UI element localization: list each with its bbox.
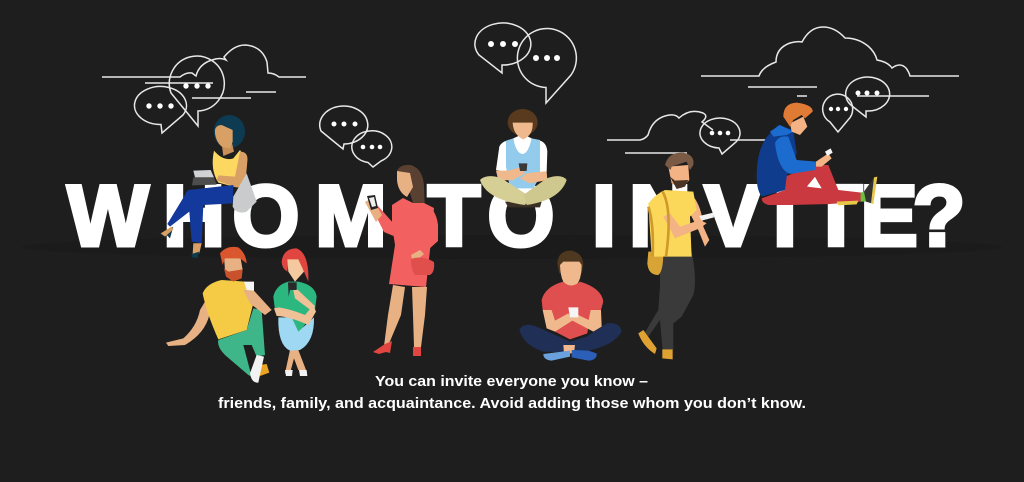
speech bubble: right lower (823, 94, 853, 132)
cloud: left (102, 45, 306, 98)
speech bubble: left small (134, 87, 186, 133)
figure: man in blue hoodie sitting on title (757, 103, 877, 205)
speech bubble pair: above woman in dress (320, 106, 392, 167)
speech bubble: right upper (846, 77, 890, 117)
figure: woman with tablet (158, 115, 257, 258)
caption text: friends, family, and acquaintance. Avoid adding those whom you don’t know. (218, 395, 806, 412)
speech bubble pair: top centre (475, 23, 576, 103)
figure: man in red shirt, cross-legged (519, 251, 622, 361)
figure: man with vest, cross-legged on title (480, 109, 567, 207)
cloud: middle right (607, 111, 766, 153)
speech bubble: left large (169, 56, 224, 126)
figure: man with beard, sitting (166, 247, 272, 383)
title: WHOM TO INVITE? (67, 168, 965, 264)
figure: red-haired woman, sitting (273, 248, 317, 376)
figure: standing man with shoulder bag (638, 153, 714, 359)
caption text: You can invite everyone you know – (375, 373, 648, 390)
figure: woman in coral dress (365, 165, 438, 356)
speech bubble: middle right (700, 118, 740, 154)
cloud: right (701, 27, 959, 96)
caption text (218, 373, 806, 412)
